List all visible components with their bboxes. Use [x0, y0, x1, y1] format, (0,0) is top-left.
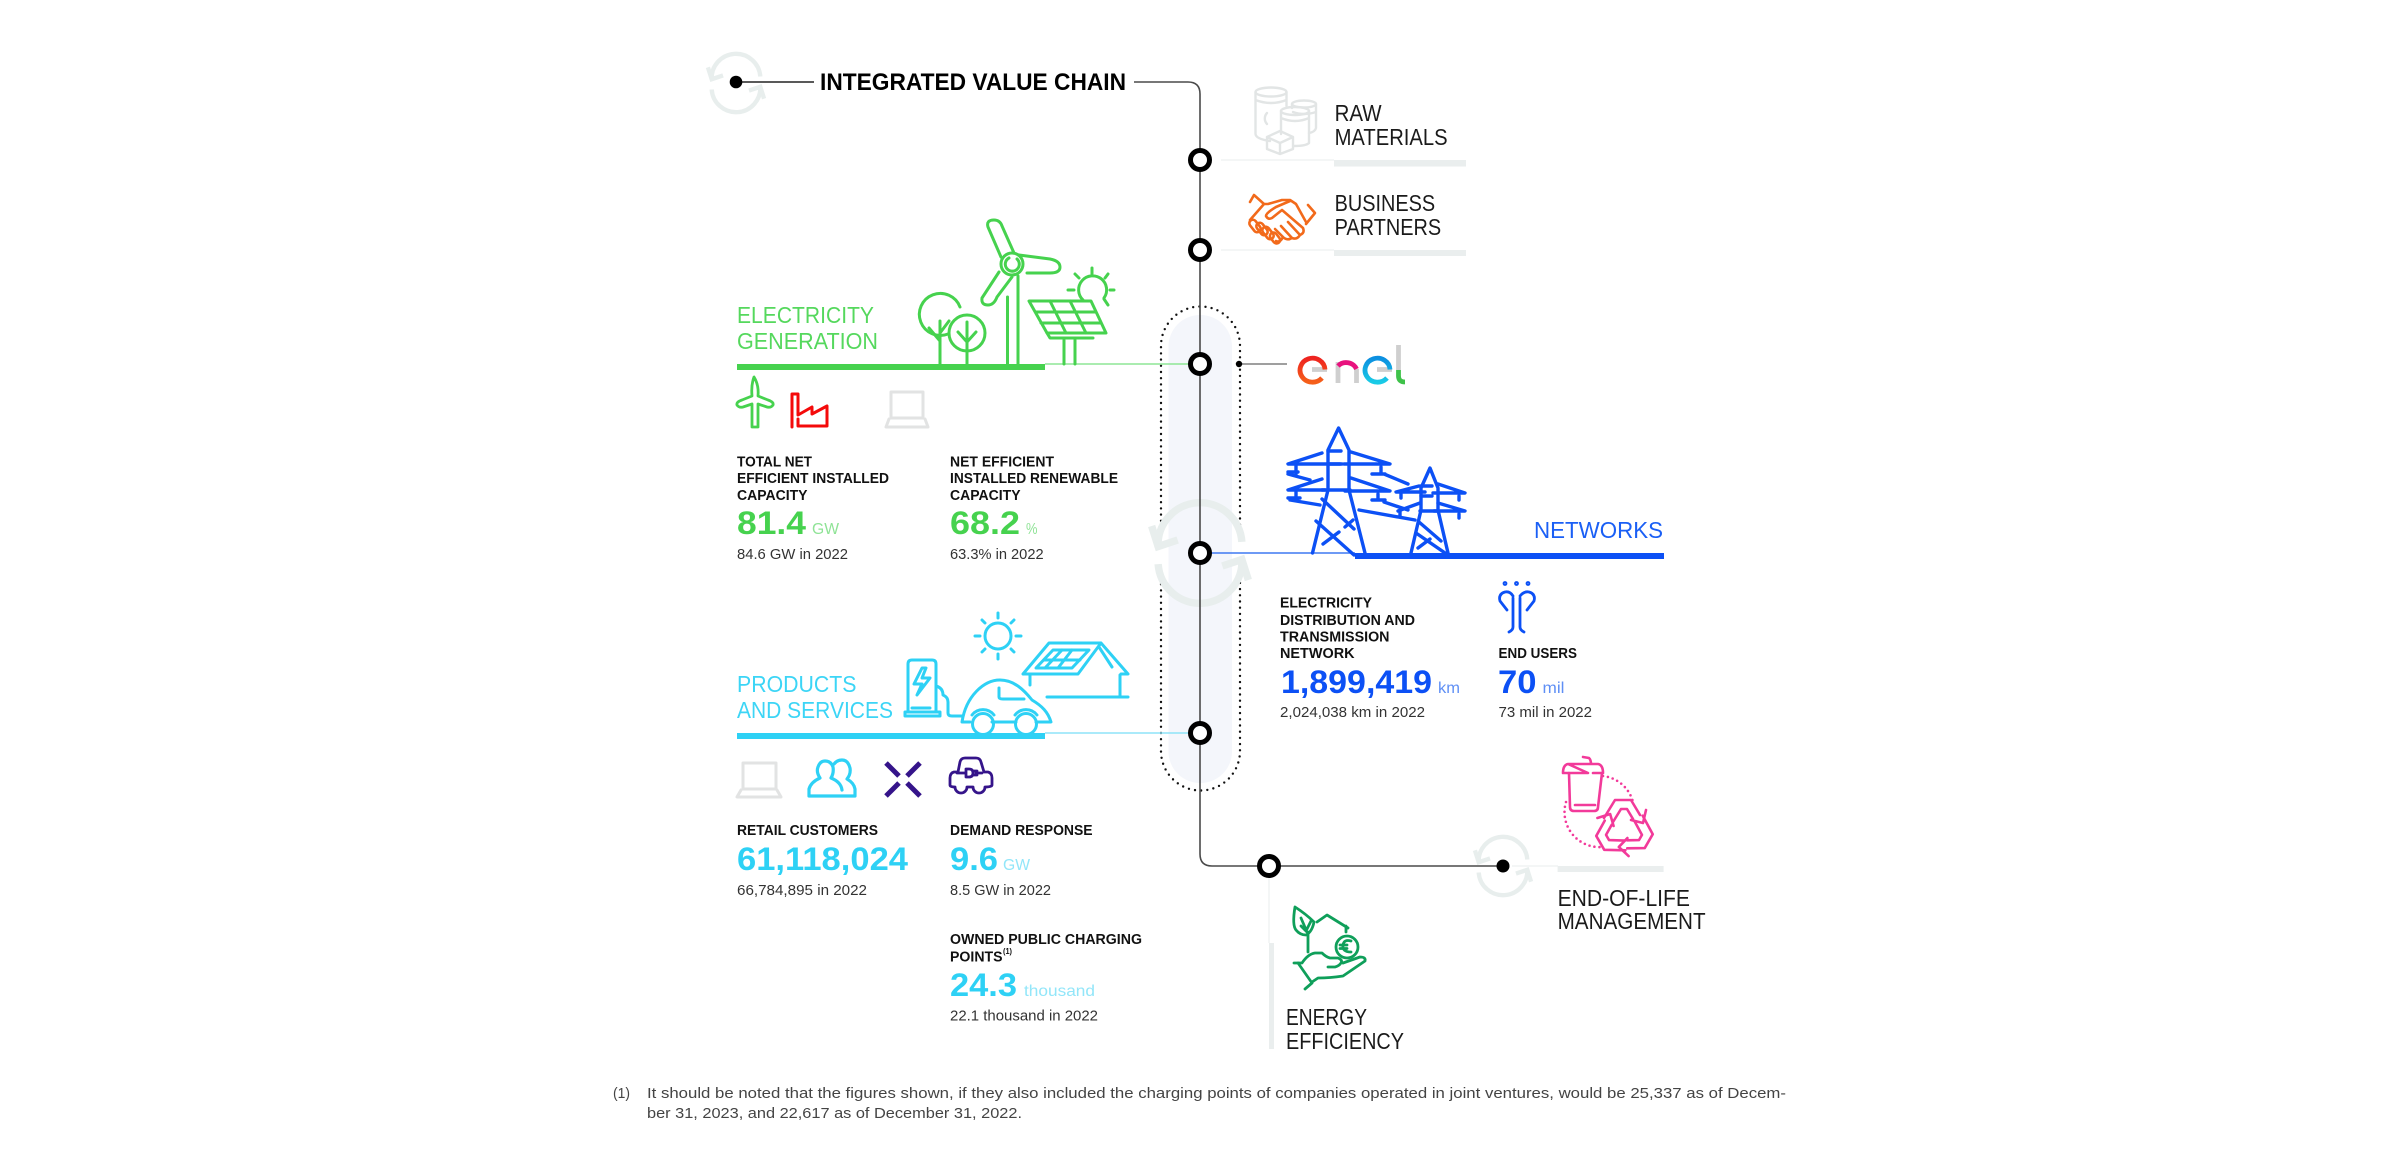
- stat: distribution network: ELECTRICITY: [1280, 596, 1372, 612]
- heading: electricity generation: [737, 302, 878, 354]
- icon: car with plug: [950, 758, 992, 793]
- footnote: It should be noted that the figures shown, if they also included the charging points of companies operated in joint ventures, would be 25,337 as of Decem-: [647, 1086, 1786, 1102]
- panel: raw materials: [1221, 88, 1466, 166]
- heading: products and services: [737, 671, 893, 723]
- stat: demand response: 9.6: [950, 841, 998, 877]
- icon: factory: [792, 394, 827, 427]
- stat: renewable capacity: INSTALLED RENEWABLE: [950, 471, 1118, 487]
- value chain line: [1134, 82, 1503, 866]
- icon: laptop: [886, 392, 928, 427]
- icon: people: [809, 760, 855, 796]
- stat: distribution network: 1,899,419: [1281, 664, 1432, 700]
- stat: distribution network: NETWORK: [1280, 646, 1355, 662]
- label: raw materials: RAW: [1335, 100, 1382, 126]
- heading: electricity generation: ELECTRICITY: [737, 302, 874, 328]
- panel: networks: [1208, 428, 1664, 721]
- stat: retail customers: [737, 823, 908, 899]
- stat: end users: [1498, 582, 1592, 721]
- stat: distribution network: TRANSMISSION: [1280, 630, 1390, 646]
- stat: total net capacity: [737, 455, 889, 563]
- stat: demand response: 8.5 GW in 2022: [950, 883, 1051, 899]
- label: end-of-life management: END-OF-LIFE: [1558, 885, 1690, 911]
- icon: mini wind turbine: [737, 377, 773, 427]
- panel: products and services: [737, 613, 1190, 1025]
- stat: public charging points: OWNED PUBLIC CHARGING: [950, 932, 1142, 948]
- title: INTEGRATED VALUE CHAIN: [820, 69, 1126, 96]
- label: energy efficiency: ENERGY: [1286, 1004, 1367, 1030]
- icon: handshake: [1248, 195, 1315, 245]
- label: business partners: [1335, 190, 1441, 240]
- label: energy efficiency: EFFICIENCY: [1286, 1028, 1404, 1054]
- label: business partners: PARTNERS: [1335, 214, 1441, 240]
- label: raw materials: [1335, 100, 1448, 150]
- stat: public charging points: POINTS: [950, 950, 1003, 966]
- icon: energy efficiency hand: [1294, 907, 1365, 989]
- start connector: [730, 76, 814, 88]
- stat: distribution network: km: [1438, 680, 1460, 697]
- heading: electricity generation: GENERATION: [737, 328, 878, 354]
- stat: public charging points: [950, 932, 1142, 1025]
- stat: renewable capacity: [950, 455, 1118, 563]
- icon: start cycle arrows: [708, 54, 764, 112]
- stat: end users: mil: [1542, 680, 1564, 697]
- stat: retail customers: 61,118,024: [737, 841, 908, 877]
- stat: renewable capacity: 63.3% in 2022: [950, 547, 1044, 563]
- icon: end users: [1500, 582, 1534, 632]
- stat: public charging points: 24.3: [950, 967, 1017, 1003]
- label: business partners: BUSINESS: [1335, 190, 1435, 216]
- stat: public charging points: 22.1 thousand in 2022: [950, 1009, 1098, 1025]
- icon: wind turbine, trees and solar panel: [919, 220, 1114, 364]
- stat: demand response: [950, 823, 1093, 899]
- stat: total net capacity: CAPACITY: [737, 488, 808, 504]
- stat: end users: END USERS: [1498, 646, 1577, 662]
- stat: end users: 70: [1498, 664, 1536, 700]
- icon: cup and recycling: [1563, 757, 1658, 861]
- panel: electricity generation: [737, 220, 1190, 563]
- stat: renewable capacity: CAPACITY: [950, 488, 1021, 504]
- stat: total net capacity: TOTAL NET: [737, 455, 812, 471]
- enel logo: [1236, 345, 1405, 383]
- footnote: ber 31, 2023, and 22,617 as of December 31, 2022.: [647, 1106, 1022, 1122]
- stat: renewable capacity: NET EFFICIENT: [950, 455, 1054, 471]
- central capsule background: [1161, 306, 1240, 791]
- stat: demand response: DEMAND RESPONSE: [950, 823, 1093, 839]
- stat: distribution network: DISTRIBUTION AND: [1280, 613, 1415, 629]
- stat: distribution network: [1280, 596, 1460, 721]
- icon: laptop: [737, 763, 781, 797]
- panel: end-of-life management: [1496, 757, 1706, 934]
- stat: total net capacity: EFFICIENT INSTALLED: [737, 471, 889, 487]
- stat: demand response: GW: [1003, 857, 1031, 874]
- stat: public charging points: (1): [1003, 947, 1012, 956]
- stat: distribution network: 2,024,038 km in 2022: [1280, 705, 1425, 721]
- icon: end cycle arrows: [1475, 837, 1531, 895]
- icon: charger, car, sun and house: [905, 613, 1128, 734]
- icon: pylons: [1288, 428, 1465, 555]
- stat: public charging points: thousand: [1024, 983, 1095, 1000]
- stat: end users: 73 mil in 2022: [1498, 705, 1592, 721]
- panel: energy efficiency: [1269, 876, 1404, 1054]
- heading: products and services: PRODUCTS: [737, 671, 856, 697]
- footnote: [613, 1086, 1786, 1122]
- icon: central cycle arrows: [1152, 503, 1248, 603]
- stat: renewable capacity: 68.2: [950, 505, 1020, 541]
- stat: retail customers: RETAIL CUSTOMERS: [737, 823, 878, 839]
- heading: networks: NETWORKS: [1534, 517, 1663, 543]
- icon: raw materials: [1256, 88, 1316, 154]
- stat: renewable capacity: %: [1026, 521, 1038, 538]
- stat: total net capacity: 84.6 GW in 2022: [737, 547, 848, 563]
- icon: demand response cross: [886, 763, 920, 796]
- label: end-of-life management: MANAGEMENT: [1558, 908, 1706, 934]
- label: energy efficiency: [1286, 1004, 1404, 1054]
- stat: retail customers: 66,784,895 in 2022: [737, 883, 867, 899]
- heading: products and services: AND SERVICES: [737, 697, 893, 723]
- footnote: (1): [613, 1086, 630, 1102]
- stat: total net capacity: GW: [812, 521, 840, 538]
- stat: total net capacity: 81.4: [737, 505, 806, 541]
- label: end-of-life management: [1558, 885, 1706, 934]
- panel: business partners: [1221, 190, 1466, 256]
- label: raw materials: MATERIALS: [1335, 124, 1448, 150]
- chain nodes: [1190, 150, 1278, 876]
- end dot: [1496, 860, 1510, 872]
